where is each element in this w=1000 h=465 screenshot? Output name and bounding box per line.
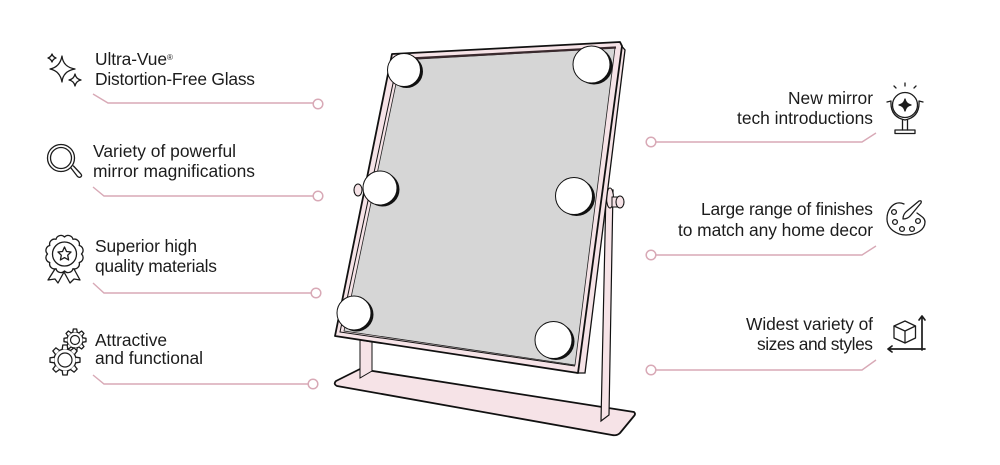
text: Large range of finishes — [701, 199, 873, 219]
glass — [344, 48, 615, 365]
text: Superior high — [95, 236, 197, 256]
bulb: top right — [573, 46, 612, 84]
feature: new mirror tech: tech introductions — [737, 108, 873, 128]
left pivot knob — [354, 184, 362, 196]
feature: finishes: to match any home decor — [678, 220, 873, 240]
feature: attractive and functional: and functional — [95, 348, 203, 368]
feature: finishes — [646, 199, 925, 260]
inner frame line — [340, 60, 575, 366]
mirror illustration — [335, 42, 635, 435]
icon: cube with axes — [888, 316, 925, 352]
mirror back edge — [577, 43, 625, 373]
icon: magnifying glass — [48, 144, 82, 177]
connector — [646, 360, 876, 375]
icon: table mirror — [887, 83, 923, 134]
connector — [646, 246, 876, 260]
feature: new mirror tech — [646, 83, 923, 147]
feature: materials — [46, 235, 321, 298]
connector — [646, 133, 876, 147]
text: Variety of powerful — [93, 141, 236, 161]
left post — [360, 340, 372, 378]
text: New mirror — [788, 88, 873, 108]
right post — [601, 190, 613, 421]
mirror frame — [335, 42, 622, 373]
feature: magnifications: mirror magnifications — [93, 161, 255, 181]
connector — [93, 94, 323, 109]
large gear — [50, 345, 80, 375]
stand base — [335, 369, 635, 435]
text: Attractive — [95, 330, 167, 350]
icon: paint palette — [887, 201, 925, 235]
feature: attractive and functional — [50, 329, 318, 389]
icon: award badge — [46, 235, 83, 283]
icon: sparkles — [48, 54, 81, 86]
connector — [93, 283, 321, 298]
icon: gears — [50, 329, 86, 375]
feature: sizes and styles — [646, 314, 925, 375]
feature: distortion-free glass: Distortion-Free Glass — [95, 69, 255, 89]
bulb: bottom right — [535, 322, 574, 360]
connector — [93, 375, 318, 389]
bulb: top left — [388, 54, 423, 88]
feature: sizes and styles: sizes and styles — [757, 334, 873, 354]
bulb: middle right — [556, 178, 595, 216]
feature: materials: quality materials — [95, 256, 217, 276]
small gear — [64, 329, 86, 351]
registered mark: ® — [167, 53, 173, 62]
feature: distortion-free glass — [48, 49, 323, 109]
connector — [93, 187, 323, 201]
top shadow of glass — [401, 48, 616, 59]
feature: magnifications — [48, 141, 323, 201]
bulb: bottom left — [337, 296, 374, 332]
text: Ultra-Vue — [95, 49, 167, 69]
bulb: middle left — [363, 171, 400, 206]
right pivot knob — [606, 188, 624, 208]
text: Widest variety of — [746, 314, 873, 334]
